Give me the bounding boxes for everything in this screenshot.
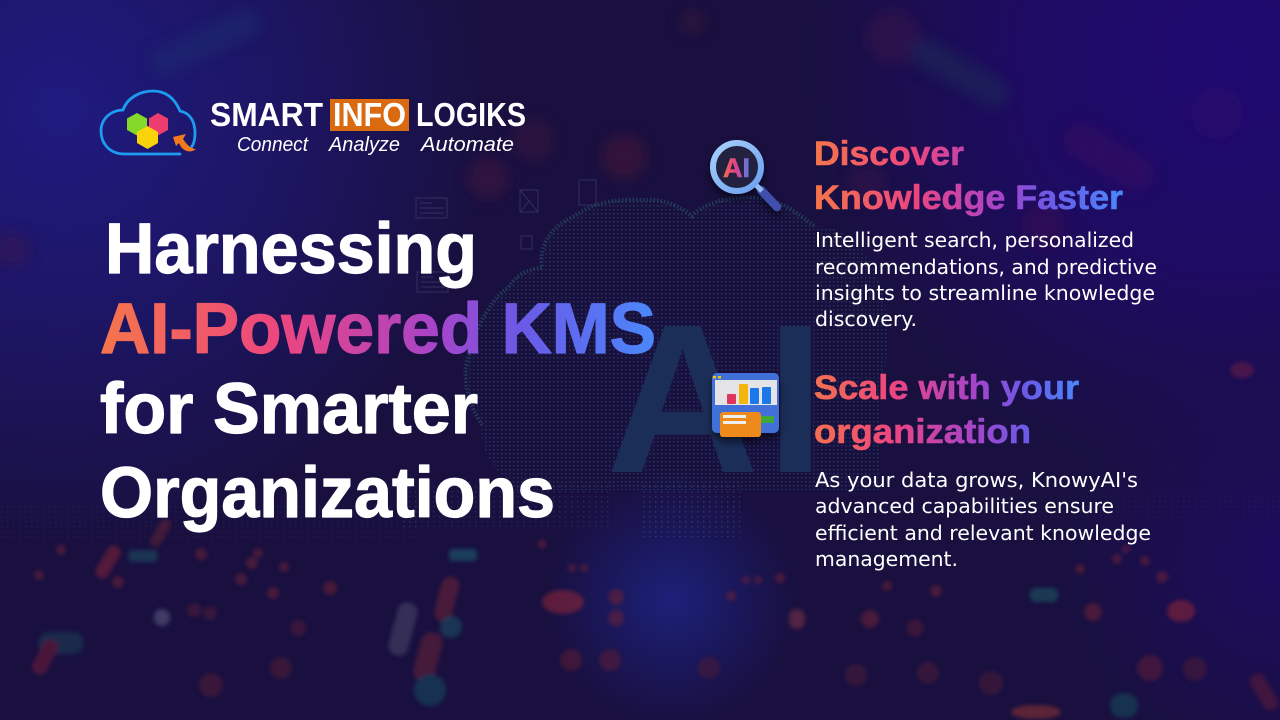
section: scale with your organization <box>814 369 1151 571</box>
main title: AI-Powered KMS <box>100 290 656 369</box>
main title: Organizations <box>100 454 555 533</box>
text block: discover description: discovery. <box>815 307 917 331</box>
logo wordmark <box>210 96 526 133</box>
text block: scale description: As your data grows, KnowyAI's <box>815 468 1138 492</box>
icon: AI magnifying glass: AI <box>723 153 750 183</box>
text block: scale description <box>815 468 1151 571</box>
background letters: AI: AI <box>606 280 825 517</box>
icon: AI magnifying glass <box>713 143 777 207</box>
heading: discover knowledge faster: Discover <box>814 135 964 173</box>
logo tagline <box>237 134 514 156</box>
dotted data cloud <box>464 195 886 490</box>
faint document icons <box>416 180 596 292</box>
heading: scale with your organization: Scale with your <box>814 369 1079 407</box>
main title: for Smarter <box>100 370 478 449</box>
heading: discover knowledge faster <box>814 135 1123 217</box>
logo wordmark: INFO <box>333 96 406 133</box>
text block: discover description: recommendations, and predictive <box>815 255 1157 279</box>
logo <box>101 91 526 156</box>
main title: Harnessing <box>105 210 477 289</box>
logo tagline: Analyze <box>328 134 400 156</box>
logo wordmark: SMART <box>210 96 323 133</box>
heading: scale with your organization <box>814 369 1079 451</box>
logo wordmark: LOGIKS <box>416 96 526 133</box>
section: discover knowledge faster <box>814 135 1157 331</box>
text block: scale description: advanced capabilities ensure <box>815 494 1114 518</box>
heading: scale with your organization: organization <box>814 413 1031 451</box>
text block: discover description <box>815 228 1157 331</box>
text block: discover description: insights to streamline knowledge <box>815 281 1155 305</box>
logo tagline: Automate <box>420 134 514 156</box>
text block: discover description: Intelligent search, personalized <box>815 228 1134 252</box>
logo icon: cloud with hexagons <box>101 91 196 154</box>
main title <box>100 210 656 533</box>
logo tagline: Connect <box>237 134 309 156</box>
heading: discover knowledge faster: Knowledge Faster <box>814 179 1123 217</box>
text block: scale description: management. <box>815 547 958 571</box>
icon: dashboard window with folder <box>712 373 779 437</box>
text block: scale description: efficient and relevant knowledge <box>815 521 1151 545</box>
